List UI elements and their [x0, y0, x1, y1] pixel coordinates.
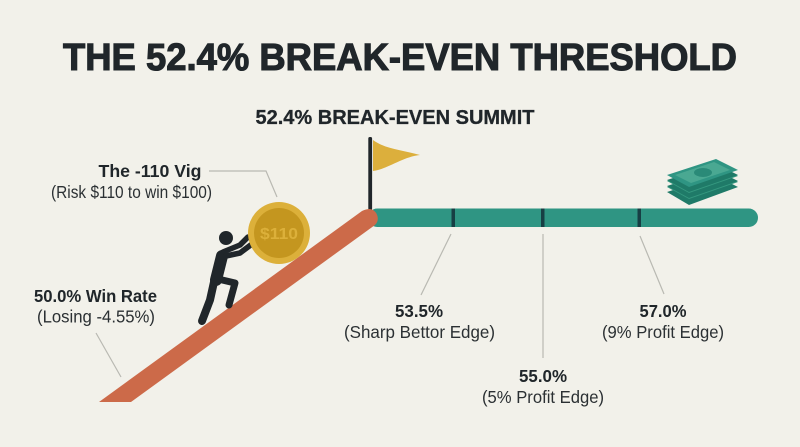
icon: climber figure [202, 231, 252, 321]
profit plateau bar [368, 208, 758, 227]
callout: 50.0% win rate [34, 286, 157, 377]
callout: 53.5% [344, 234, 495, 342]
callout: the -110 vig: (Risk $110 to win $100) [51, 182, 212, 202]
callout: 53.5%: (Sharp Bettor Edge) [344, 322, 495, 342]
callout: 55.0%: 55.0% [519, 366, 567, 386]
callout: 57.0%: 57.0% [640, 301, 687, 321]
callout: 50.0% win rate: 50.0% Win Rate [34, 286, 157, 306]
icon: stack of money [667, 159, 738, 205]
icon: $110 coin: $110 [260, 226, 298, 243]
callout: the -110 vig: The -110 Vig [98, 161, 202, 181]
callout: 55.0% [482, 234, 604, 407]
icon: summit flag [368, 137, 420, 210]
title: THE 52.4% BREAK-EVEN THRESHOLD [63, 37, 737, 79]
callout: the -110 vig [51, 161, 277, 202]
callout: 57.0%: (9% Profit Edge) [602, 322, 724, 342]
summit heading: 52.4% BREAK-EVEN SUMMIT [256, 107, 534, 129]
callout: 57.0% [602, 236, 724, 342]
callout: 53.5%: 53.5% [395, 301, 443, 321]
ramp [99, 209, 378, 402]
callout: 50.0% win rate: (Losing -4.55%) [37, 306, 155, 326]
icon: $110 coin [248, 202, 310, 264]
callout: 55.0%: (5% Profit Edge) [482, 387, 604, 407]
